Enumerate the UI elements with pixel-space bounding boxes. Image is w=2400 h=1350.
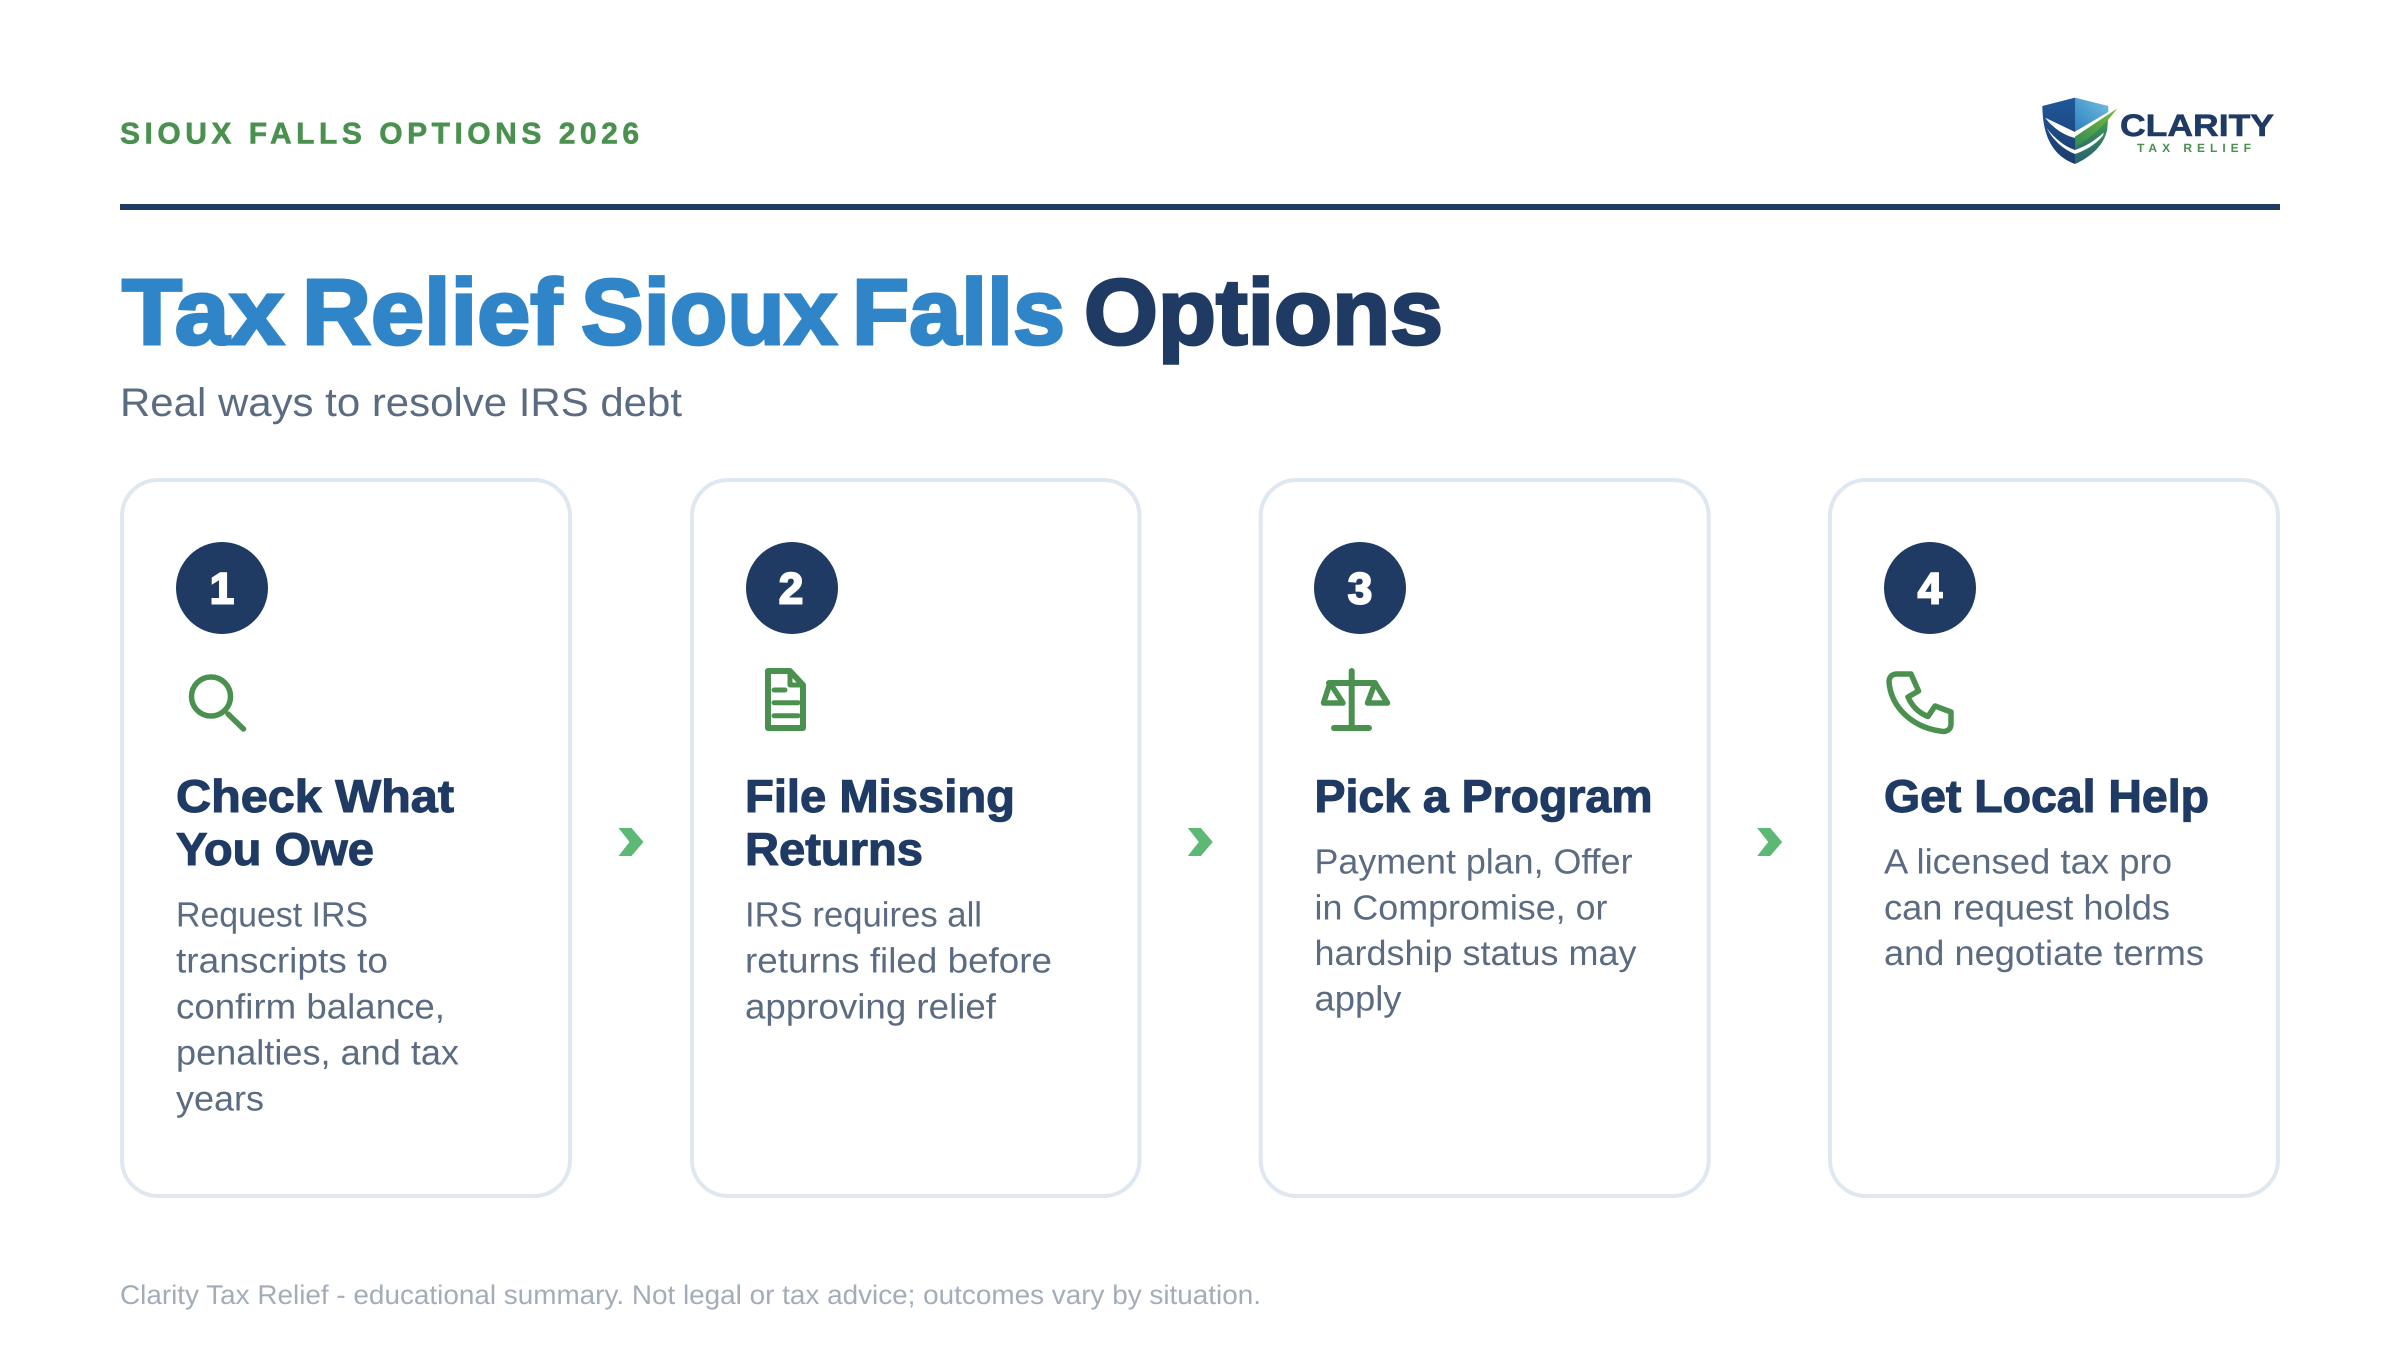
body text: hardship status may xyxy=(1314,934,1637,973)
title: blue part xyxy=(122,260,1065,364)
step number 3 xyxy=(1314,542,1406,634)
body text: Request IRS xyxy=(176,896,368,934)
heading: File Missing xyxy=(745,770,1015,822)
step number 3: 3 xyxy=(1348,564,1372,614)
body text: in Compromise, or xyxy=(1314,888,1608,928)
panel: step 4 xyxy=(1830,480,2278,1196)
card outline xyxy=(122,480,570,1196)
heading: Returns xyxy=(745,823,923,875)
title xyxy=(122,260,1443,364)
subtitle: Real ways to resolve IRS debt xyxy=(120,381,682,425)
logo tagline: TAX RELIEF xyxy=(2137,141,2251,155)
icon: shield with check xyxy=(2042,98,2117,164)
body text: and negotiate terms xyxy=(1884,934,2204,973)
step number 4 xyxy=(1884,542,1976,634)
heading xyxy=(176,770,454,875)
icon: telephone xyxy=(1889,674,1951,731)
body text: penalties, and tax xyxy=(176,1034,460,1072)
header rule xyxy=(120,204,2280,210)
body text: transcripts to xyxy=(176,942,388,980)
arrow 1 to 2 xyxy=(618,828,644,856)
body text xyxy=(176,896,460,1118)
icon: balance scale xyxy=(1324,671,1388,728)
panel: step 2 xyxy=(692,480,1140,1196)
icon: document xyxy=(768,671,803,728)
panel: step 3 xyxy=(1261,480,1709,1196)
footer disclaimer: Clarity Tax Relief - educational summary. Not legal or tax advice; outcomes vary by situation. xyxy=(120,1280,1261,1310)
step number 1 xyxy=(176,542,268,634)
heading: You Owe xyxy=(176,823,374,875)
body text: Payment plan, Offer xyxy=(1314,842,1633,882)
card outline xyxy=(1830,480,2278,1196)
body text: returns filed before xyxy=(745,942,1052,980)
step number 2 xyxy=(746,542,838,634)
eyebrow label: SIOUX FALLS OPTIONS 2026 xyxy=(120,118,639,150)
body text: confirm balance, xyxy=(176,988,445,1026)
arrow 2 to 3 xyxy=(1188,828,1213,856)
title: blue part: Sioux xyxy=(581,260,837,364)
title: blue part: Tax xyxy=(122,260,284,364)
body text: A licensed tax pro xyxy=(1884,842,2172,882)
body text xyxy=(1884,842,2204,973)
step number 4: 4 xyxy=(1918,564,1943,614)
title: blue part: Falls xyxy=(852,260,1065,364)
body text: approving relief xyxy=(745,988,996,1026)
card outline xyxy=(1261,480,1709,1196)
logo wordmark: CLARITY xyxy=(2120,108,2274,143)
title: navy part: Options xyxy=(1084,260,1443,364)
icon: magnifying glass xyxy=(192,677,244,729)
heading xyxy=(745,770,1015,875)
step number 2: 2 xyxy=(779,564,803,614)
arrow 3 to 4 xyxy=(1757,828,1782,856)
body text: apply xyxy=(1314,980,1402,1018)
body text: years xyxy=(176,1080,264,1118)
body text xyxy=(1314,842,1637,1018)
heading: Pick a Program xyxy=(1314,770,1652,822)
body text: can request holds xyxy=(1884,888,2170,928)
step number 1: 1 xyxy=(210,564,234,614)
logo: Clarity Tax Relief xyxy=(2042,98,2274,164)
card outline xyxy=(692,480,1140,1196)
heading: Check What xyxy=(176,770,454,822)
heading: Get Local Help xyxy=(1884,770,2209,822)
panel: step 1 xyxy=(122,480,570,1196)
body text: IRS requires all xyxy=(745,896,982,934)
title: blue part: Relief xyxy=(302,260,563,364)
body text xyxy=(745,896,1052,1026)
